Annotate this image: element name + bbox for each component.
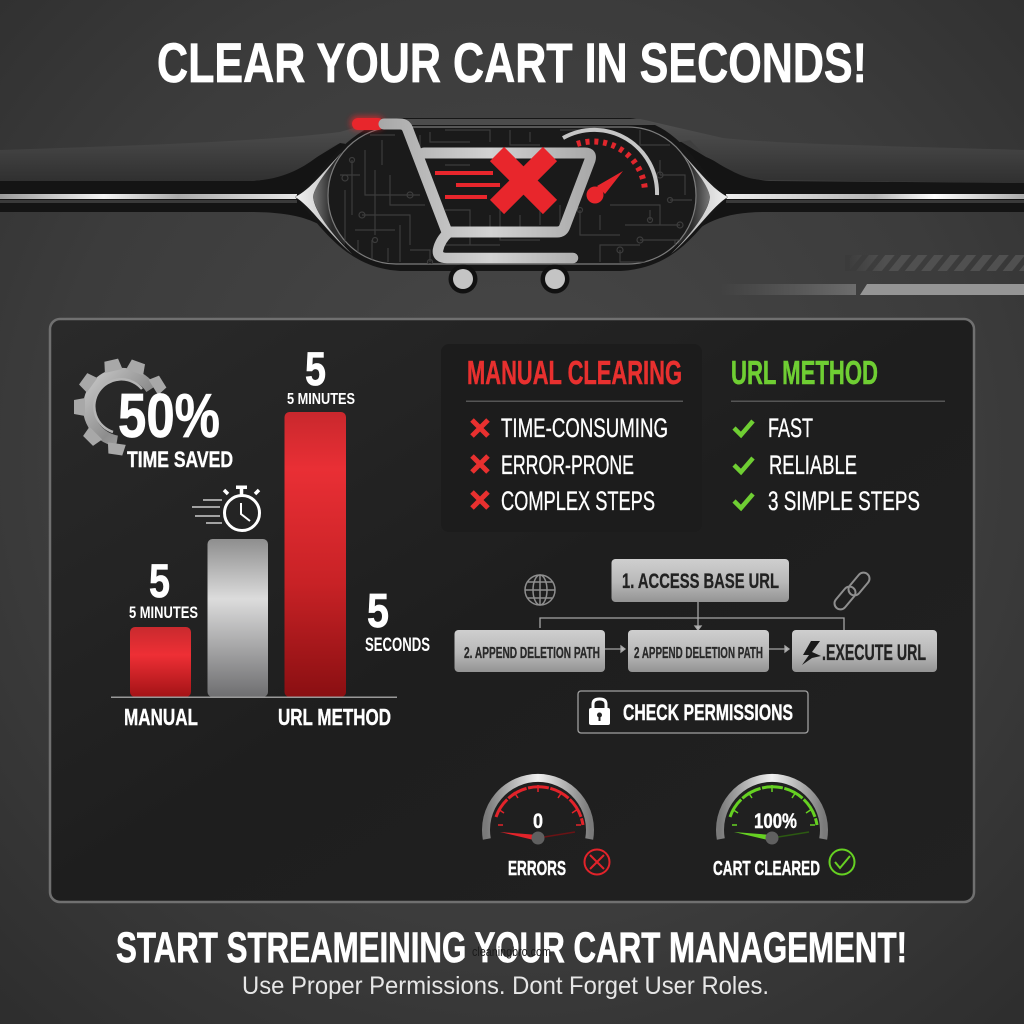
step: append deletion path 2: 2 APPEND DELETION PATH [634, 645, 763, 662]
circuit traces [340, 130, 692, 264]
step: execute URL: .EXECUTE URL [822, 640, 926, 665]
red X [497, 154, 550, 207]
list: manual drawbacks: COMPLEX STEPS [501, 486, 655, 516]
list: manual drawbacks: ERROR-PRONE [501, 450, 634, 480]
step: append deletion path: 2. APPEND DELETION PATH [464, 645, 600, 662]
list: manual drawbacks: TIME-CONSUMING [501, 413, 668, 443]
icon: padlock [589, 699, 610, 725]
list: manual drawbacks [472, 413, 668, 516]
main panel [50, 319, 974, 902]
cart wheels [448, 264, 570, 294]
seconds value [365, 585, 430, 656]
bar: URL method [284, 412, 346, 697]
circuit screen [328, 127, 696, 264]
seconds value: SECONDS [365, 635, 430, 656]
stat: 50% time saved: 50% [118, 382, 220, 451]
gauge: errors: ERRORS [508, 858, 566, 880]
step: access base URL: 1. ACCESS BASE URL [622, 570, 779, 593]
gauge: cart cleared [713, 778, 854, 880]
check permissions: CHECK PERMISSIONS [623, 700, 793, 725]
cart red handle tip [350, 116, 384, 130]
inner bezel shading [313, 150, 710, 245]
step: append deletion path [454, 630, 605, 672]
shopping cart icon [384, 124, 590, 258]
panel: URL method [731, 354, 945, 516]
watermark: cleaningbro.com [472, 945, 551, 959]
decorative stripes [720, 255, 1024, 295]
icon: stopwatch [192, 486, 260, 530]
gauge: errors [486, 778, 610, 880]
URL method value: 5 [305, 342, 326, 395]
list: URL benefits: FAST [768, 413, 813, 443]
top trim [380, 119, 660, 125]
axis labels: MANUAL [124, 704, 198, 730]
icon: globe [525, 575, 555, 605]
axis [111, 696, 397, 698]
bar: middle silver [208, 539, 268, 697]
panel: manual clearing [441, 344, 702, 532]
speed gauge [563, 130, 657, 204]
heading: manual clearing: MANUAL CLEARING [467, 354, 682, 391]
icon: chain link [832, 570, 872, 612]
gauge: cart cleared: 100% [754, 810, 797, 833]
speed lines [435, 171, 500, 199]
step: append deletion path 2 [628, 630, 769, 672]
icon: X badge [584, 850, 610, 874]
chrome bezels [295, 152, 728, 254]
console body [295, 118, 728, 271]
axis labels: URL METHOD [278, 704, 391, 730]
flow diagram [454, 559, 937, 733]
gauge: cart cleared: CART CLEARED [713, 858, 820, 880]
connectors [540, 602, 844, 652]
manual value: 5 [149, 554, 170, 607]
manual value [129, 554, 198, 622]
hero cart console [295, 116, 728, 294]
heading: URL method: URL METHOD [731, 354, 878, 391]
axis labels [124, 704, 391, 730]
seconds value: 5 [367, 585, 389, 638]
URL method value: 5 MINUTES [287, 391, 355, 408]
footer subtitle: Use Proper Permissions. Dont Forget User Roles. [242, 972, 769, 1000]
manual value: 5 MINUTES [129, 603, 198, 622]
list: URL benefits: RELIABLE [769, 450, 857, 480]
icon: check badge [830, 850, 854, 874]
list: URL benefits: 3 SIMPLE STEPS [768, 486, 920, 516]
check permissions [578, 691, 808, 733]
URL method value [287, 342, 355, 408]
gauge: errors: 0 [533, 810, 543, 833]
bar chart [111, 342, 430, 730]
step: access base URL [612, 559, 789, 602]
list: URL benefits [734, 413, 920, 516]
hero band with chrome trim [0, 119, 1024, 247]
step: execute URL [792, 630, 937, 672]
stat: 50% time saved: TIME SAVED [127, 447, 233, 472]
icon: gear [74, 358, 167, 456]
bar: manual [130, 627, 191, 697]
